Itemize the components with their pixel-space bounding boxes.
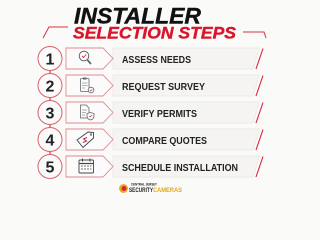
infographic	[38, 4, 266, 194]
red slash	[256, 102, 263, 123]
step 3	[38, 100, 263, 124]
label: ASSESS NEEDS	[122, 55, 191, 66]
arrow tab	[66, 75, 113, 96]
row bar	[113, 75, 260, 96]
icon: price tag	[77, 132, 94, 148]
number badge	[38, 46, 62, 70]
step 1	[38, 46, 263, 70]
arrow tab	[66, 48, 113, 69]
title: installer: INSTALLER	[74, 4, 201, 28]
title: selection steps: SELECTION STEPS	[73, 24, 237, 42]
icon: clipboard with check	[80, 78, 94, 93]
number badge	[38, 128, 62, 152]
icon: magnifier with check	[79, 51, 91, 64]
number badge: 3	[46, 105, 55, 122]
step 5	[38, 154, 263, 178]
icon: document with shield	[80, 105, 94, 120]
number badge	[38, 74, 62, 98]
red slash	[256, 130, 263, 150]
arrow tab	[66, 102, 113, 123]
label: REQUEST SURVEY	[122, 82, 205, 93]
right title bracket	[243, 32, 266, 38]
row bar	[113, 156, 260, 177]
number badge: 1	[46, 51, 55, 68]
number badge	[38, 100, 62, 124]
number badge: 2	[46, 78, 55, 95]
red slash	[256, 48, 263, 69]
number badge: 5	[46, 159, 55, 176]
logo wordmark: SECURITY	[129, 187, 153, 194]
red slash	[256, 156, 263, 177]
step 4	[38, 128, 263, 152]
arrow tab	[66, 156, 113, 177]
logo mark	[119, 184, 128, 193]
number badge: 4	[46, 132, 55, 149]
icon: calendar	[79, 158, 94, 173]
left title bracket	[43, 27, 68, 38]
number badge	[38, 154, 62, 178]
red slash	[256, 76, 263, 96]
logo wordmark accent: CAMERAS	[153, 187, 183, 194]
row bar	[113, 102, 260, 123]
arrow tab	[66, 129, 113, 150]
label: SCHEDULE INSTALLATION	[122, 163, 238, 174]
logo: central jersey security cameras	[119, 182, 183, 194]
row bar	[113, 48, 260, 69]
timeline connector	[49, 68, 51, 156]
step 2	[38, 74, 263, 98]
label: VERIFY PERMITS	[122, 109, 197, 120]
label: COMPARE QUOTES	[122, 136, 207, 147]
logo small line: CENTRAL JERSEY	[131, 182, 158, 186]
row bar	[113, 129, 260, 150]
